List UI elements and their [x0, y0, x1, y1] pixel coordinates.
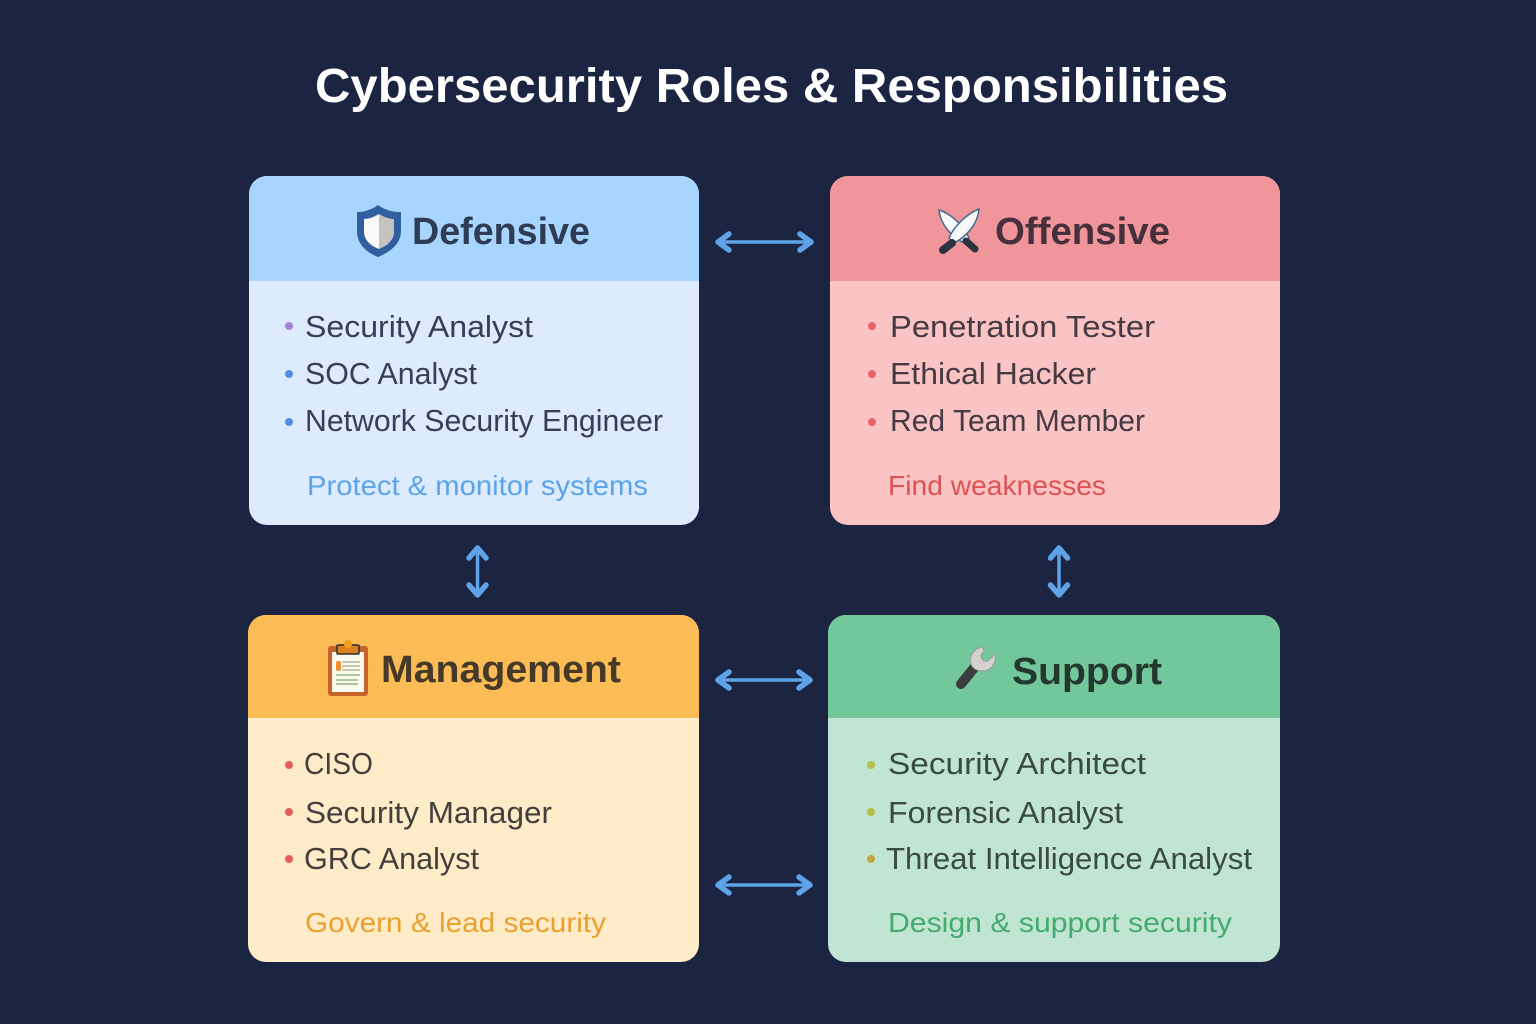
heading: support: Support [1012, 651, 1162, 693]
tagline: defensive: Protect & monitor systems [307, 470, 648, 501]
tagline: management: Govern & lead security [305, 907, 606, 938]
arrow: management to support bottom [718, 877, 810, 893]
title: Cybersecurity Roles & Responsibilities [315, 60, 1228, 113]
tagline: support: Design & support security [888, 907, 1232, 938]
panel: offensive [830, 176, 1280, 525]
list: support roles [867, 746, 1252, 876]
icon: clipboard [328, 640, 368, 696]
list: offensive roles: Red Team Member [890, 403, 1145, 438]
heading: defensive: Defensive [412, 211, 590, 253]
list: offensive roles [868, 309, 1155, 438]
list: defensive roles: Network Security Engineer [305, 403, 663, 438]
list: defensive roles [285, 309, 663, 438]
list: support roles: Forensic Analyst [888, 795, 1123, 830]
list: management roles [285, 746, 552, 876]
list: management roles: Security Manager [305, 795, 552, 830]
list: management roles: CISO [304, 746, 373, 781]
icon: wrench [961, 647, 995, 684]
icon: shield [357, 205, 401, 257]
arrow: defensive to offensive [718, 234, 811, 250]
heading: management: Management [381, 649, 621, 691]
arrow: defensive to management [469, 548, 486, 595]
heading: offensive: Offensive [995, 211, 1170, 253]
list: defensive roles: Security Analyst [305, 309, 533, 344]
list: management roles: GRC Analyst [304, 841, 479, 876]
list: defensive roles: SOC Analyst [305, 356, 477, 391]
icon: crossed knives [939, 209, 979, 250]
panel: defensive [249, 176, 699, 525]
arrow: management to support top [718, 672, 810, 688]
tagline: offensive: Find weaknesses [888, 470, 1106, 501]
panel: management [248, 615, 699, 962]
list: offensive roles: Penetration Tester [890, 309, 1155, 344]
arrow: offensive to support [1050, 548, 1068, 595]
list: offensive roles: Ethical Hacker [890, 356, 1096, 391]
panel: support [828, 615, 1280, 962]
list: support roles: Threat Intelligence Analyst [886, 841, 1252, 876]
list: support roles: Security Architect [888, 746, 1146, 781]
